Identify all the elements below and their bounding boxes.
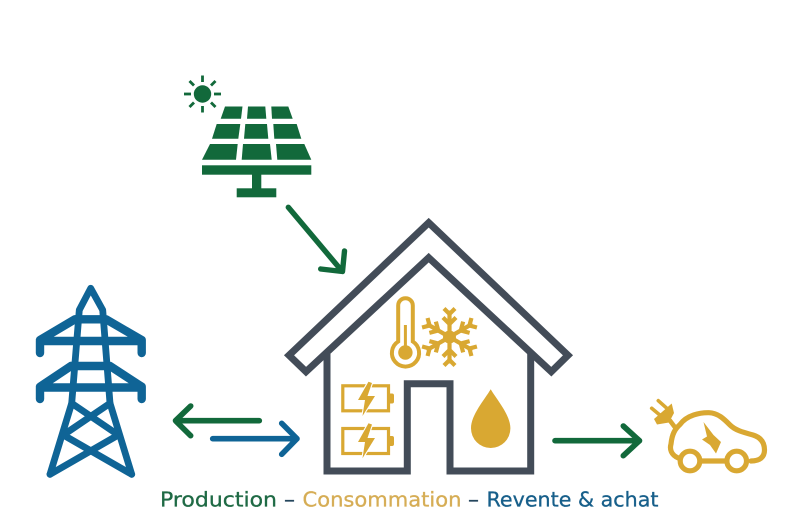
house walls and door — [327, 354, 531, 471]
icon: electric car — [652, 401, 764, 471]
icon: house — [289, 223, 568, 471]
car body — [670, 413, 764, 461]
icon: sun — [184, 76, 221, 112]
icon: battery bottom — [343, 423, 394, 458]
arrow: house to car — [555, 426, 640, 456]
house roof — [289, 223, 568, 372]
car wheels — [680, 451, 746, 471]
caption: revente and achat: Revente & achat — [486, 488, 659, 512]
car plug — [652, 401, 677, 430]
icon: battery top — [343, 382, 394, 416]
car lightning bolt — [702, 422, 721, 454]
arrow: solar panel to house — [288, 207, 344, 272]
icon: solar panel — [202, 106, 311, 197]
icon: water drop — [471, 389, 510, 448]
caption: consommation: Consommation — [302, 488, 462, 512]
arrow: house to grid — [176, 406, 259, 436]
icon: thermometer — [392, 298, 419, 367]
icon: electricity pylon — [40, 288, 142, 474]
icon: snowflake — [422, 308, 477, 366]
arrow: grid to house — [213, 423, 297, 454]
caption: dash: – — [284, 488, 295, 512]
caption — [160, 488, 659, 512]
caption: production: Production — [160, 488, 277, 512]
caption: second dash: – — [468, 488, 479, 512]
